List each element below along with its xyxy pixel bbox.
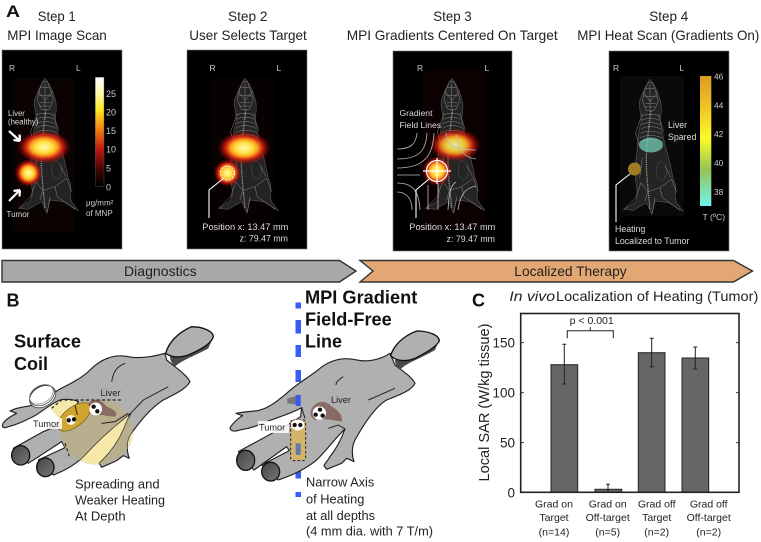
colour bar labels: 40 [714, 158, 724, 168]
position text: Position x: 13.47 mm [409, 222, 495, 232]
illustration: surface coil on body [2, 327, 213, 477]
significance label: p < 0.001 [570, 315, 614, 327]
mouse skeleton [18, 78, 78, 213]
field lines label: Gradient [400, 108, 433, 118]
step 3 heading [347, 8, 558, 43]
colour bar labels: 25 [106, 89, 116, 99]
liver spared label [668, 120, 696, 142]
mouse skeleton [218, 78, 278, 213]
arrow: diagnostics: Diagnostics [124, 263, 197, 279]
heading: surface coil: Surface [14, 332, 81, 352]
error bars [562, 338, 697, 492]
colour bar labels: 38 [714, 187, 724, 197]
step 4 heading [577, 8, 759, 43]
orientation markers: L [276, 63, 282, 73]
colour bar [95, 77, 104, 186]
blue line through body [296, 443, 301, 455]
head shadow [395, 340, 439, 370]
colour bar labels: 20 [106, 108, 116, 118]
colour bar labels: 42 [714, 129, 724, 139]
tumor heating [53, 397, 95, 437]
y tick labels: 100 [492, 386, 515, 401]
y tick labels: 0 [507, 485, 515, 500]
colour bar labels [714, 72, 724, 197]
orientation markers: L [680, 63, 684, 73]
x labels: Off-target [687, 512, 731, 524]
colour bar unit: μg/mm² [86, 198, 114, 208]
x labels: Grad off [690, 498, 728, 510]
x labels: Off-target [586, 512, 630, 524]
leader line [616, 174, 630, 222]
liver hot spot [217, 131, 271, 165]
liver label: Liver [8, 109, 25, 118]
liver spared label: Liver [668, 120, 687, 130]
panel: step 4 heat scan [609, 51, 729, 251]
step 2 heading [189, 8, 307, 43]
field-free line [296, 302, 301, 497]
colour bar labels: 15 [106, 126, 116, 136]
caption: narrow axis: Narrow Axis [306, 475, 374, 490]
tumor hot spot [14, 159, 42, 187]
liver label [8, 109, 39, 126]
label: tumor: Tumor [259, 422, 285, 432]
position text: z: 79.47 mm [240, 234, 288, 244]
x labels: (n=2) [696, 527, 721, 539]
y axis label: Local SAR (W/kg tissue) [477, 324, 493, 482]
position text: z: 79.47 mm [447, 234, 495, 244]
orientation markers: R [210, 63, 216, 73]
colour bar unit: T (ºC) [702, 212, 725, 222]
step 1 heading: MPI Image Scan [7, 27, 107, 43]
panel label B: B [6, 291, 20, 311]
liver [88, 400, 116, 417]
caption: spreading heating: At Depth [75, 509, 126, 524]
step 3 heading: Step 3 [433, 8, 472, 24]
particles [291, 406, 326, 430]
colour bar unit: of MNP [86, 209, 113, 218]
x labels: (n=14) [539, 527, 569, 539]
x labels: Target [642, 512, 671, 524]
arrow to liver [9, 131, 20, 141]
body contour details [302, 377, 395, 429]
liver label: (healthy) [8, 118, 39, 126]
body silhouette [230, 353, 415, 480]
leader line [416, 179, 429, 218]
liver hot spot [17, 130, 71, 164]
body contour details [75, 363, 168, 423]
orientation markers: L [484, 63, 490, 73]
caption: narrow axis: (4 mm dia. with 7 T/m) [306, 524, 433, 539]
liver hot spot [429, 128, 481, 162]
label: tumor: Tumor [33, 419, 59, 429]
axes frame [521, 314, 739, 492]
tumor hot spot [214, 159, 242, 187]
x labels: Grad on [535, 498, 573, 510]
field lines label: Field Lines [400, 120, 441, 130]
bar chart [477, 314, 739, 539]
step 1 heading [7, 8, 107, 43]
step 4 heading: Step 4 [649, 8, 688, 24]
label: liver: Liver [331, 395, 351, 405]
orientation markers [9, 63, 81, 73]
orientation markers [613, 63, 684, 73]
arm shadow [287, 395, 301, 405]
gradient field lines [397, 133, 476, 210]
heating overlay on body [61, 399, 133, 464]
body silhouette [2, 353, 190, 475]
heated tumor region [628, 162, 641, 176]
target crosshair [423, 158, 451, 184]
arrow: diagnostics [2, 260, 356, 282]
orientation markers [210, 63, 282, 73]
panel: step 2 user selects target [187, 50, 307, 249]
orientation markers: L [76, 63, 81, 73]
caption: spreading heating [75, 476, 165, 524]
heading: MPI gradient field-free line: Field-Free [305, 310, 392, 330]
heading: MPI gradient field-free line [305, 287, 417, 352]
x labels [535, 498, 731, 539]
axis ticks [521, 343, 739, 443]
liver spared label: Spared [668, 132, 696, 142]
caption: spreading heating: Weaker Heating [75, 492, 165, 507]
leader line [209, 178, 224, 218]
head shadow [170, 337, 213, 367]
step 1 heading: Step 1 [38, 8, 76, 24]
caption: spreading heating: Spreading and [75, 476, 160, 491]
field lines label [400, 108, 441, 130]
heading: surface coil [14, 332, 81, 374]
caption: narrow axis: at all depths [306, 508, 375, 523]
step 3 heading: MPI Gradients Centered On Target [347, 27, 558, 43]
caption: narrow axis [306, 475, 433, 539]
illustration: MPI gradient on body [230, 331, 439, 481]
surface coil [26, 380, 60, 412]
colour bar labels: 46 [714, 72, 724, 82]
heating label: Localized to Tumor [615, 236, 689, 246]
y tick labels [492, 335, 515, 500]
head [391, 331, 439, 361]
arrow to tumor [9, 190, 20, 201]
heading: surface coil: Coil [14, 354, 48, 374]
y tick labels: 50 [500, 436, 515, 451]
position text: Position x: 13.47 mm [202, 222, 288, 232]
step 2 heading: User Selects Target [189, 27, 307, 43]
colour bar labels [106, 89, 116, 192]
spared liver region [639, 138, 663, 152]
liver particles [66, 403, 102, 425]
colour bar labels: 44 [714, 100, 724, 110]
leg ends [12, 446, 30, 465]
colour bar labels: 0 [106, 182, 111, 192]
x labels: Grad on [589, 498, 627, 510]
arrow: localized therapy: Localized Therapy [514, 263, 627, 279]
tumor hot spot [422, 156, 452, 186]
tumor label: Tumor [6, 210, 30, 219]
position text [202, 222, 288, 244]
x labels: Grad off [638, 498, 676, 510]
heading: MPI gradient field-free line: Line [305, 332, 342, 352]
panel label C: C [472, 291, 485, 311]
label: liver: Liver [100, 388, 120, 398]
leg ends [237, 450, 255, 470]
colour bar [700, 76, 711, 206]
dashed heating boundary [52, 400, 122, 458]
arrow: localized therapy [360, 260, 752, 282]
orientation markers [417, 63, 490, 73]
y tick labels: 150 [492, 335, 515, 350]
panel: step 3 gradients centred on target [393, 51, 512, 251]
position text [409, 222, 495, 244]
heating label [615, 224, 689, 246]
orientation markers: R [9, 63, 15, 73]
heading: MPI gradient field-free line: MPI Gradient [305, 287, 417, 307]
heating label: Heating [615, 224, 645, 234]
orientation markers: R [417, 63, 423, 73]
chart title: In vivo [509, 288, 555, 304]
narrow heating column [291, 420, 306, 461]
orientation markers: R [613, 63, 619, 73]
chart title: Localization of Heating (Tumor) [556, 288, 758, 304]
x labels: Target [539, 512, 569, 524]
mouse skeleton [623, 79, 683, 214]
colour bar labels: 10 [106, 144, 116, 154]
liver [311, 402, 342, 422]
caption: narrow axis: of Heating [306, 491, 364, 506]
heating spread [61, 399, 133, 464]
step 2 heading: Step 2 [228, 8, 268, 24]
x labels: (n=2) [644, 527, 669, 539]
panel label A: A [6, 2, 20, 21]
colour bar labels: 5 [106, 164, 111, 174]
significance bracket [567, 327, 613, 338]
x labels: (n=5) [595, 527, 620, 539]
panel: step 1 MPI image [2, 50, 122, 249]
target circle [220, 166, 234, 180]
colour bar unit [86, 198, 114, 218]
head [166, 327, 213, 357]
mouse skeleton [425, 78, 485, 213]
bars [551, 353, 709, 492]
